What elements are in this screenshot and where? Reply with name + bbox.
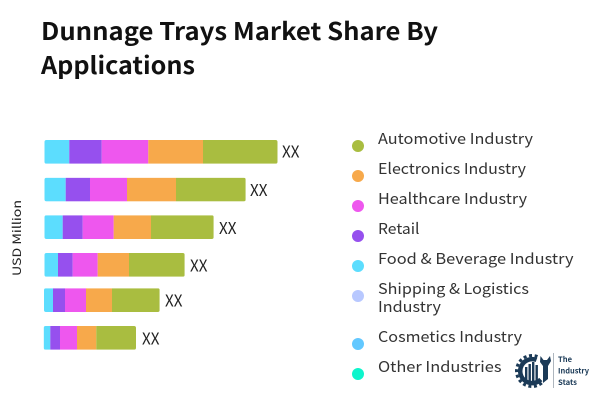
legend item: Shipping & Logistics Industry: Shipping & Logistics	[378, 278, 529, 299]
legend item: Other Industries	[352, 356, 502, 380]
legend item: Retail: Retail	[378, 218, 420, 239]
legend item: Shipping & Logistics Industry: Industry	[378, 296, 441, 317]
bar 2	[44, 178, 246, 201]
bar value labels: XX	[219, 215, 236, 239]
bar value labels	[142, 138, 300, 350]
legend item: Other Industries: Other Industries	[378, 356, 502, 377]
legend item: Electronics Industry: Electronics Industry	[378, 158, 526, 179]
icon: gear with bars and wrench	[517, 355, 551, 386]
logo: The Industry Stats	[517, 353, 590, 388]
logo wordmark: The	[558, 354, 573, 365]
legend item: Retail	[352, 218, 420, 242]
bar value labels: XX	[282, 138, 300, 162]
legend	[352, 128, 574, 380]
logo wordmark	[558, 354, 590, 388]
bar 4	[44, 253, 185, 277]
bar value labels: XX	[165, 288, 182, 312]
bar 3	[44, 215, 214, 239]
bar value labels: XX	[190, 252, 208, 276]
title: Applications	[40, 46, 195, 81]
stacked bar chart	[44, 140, 278, 350]
logo wordmark: Stats	[558, 377, 577, 388]
bar 1	[44, 140, 278, 164]
legend item: Healthcare Industry: Healthcare Industry	[378, 188, 527, 209]
title	[40, 12, 438, 81]
logo wordmark: Industry	[558, 366, 590, 376]
legend item: Cosmetics Industry	[352, 326, 522, 350]
axis label: USD Million: USD Million	[9, 200, 25, 276]
legend item: Shipping & Logistics Industry	[352, 278, 529, 317]
bar value labels: XX	[142, 326, 160, 350]
bar 5	[44, 288, 160, 312]
legend item: Healthcare Industry	[352, 188, 527, 212]
bar value labels: XX	[250, 177, 268, 201]
legend item: Food & Beverage Industry: Food & Beverage Industry	[378, 248, 574, 269]
bar 6	[44, 326, 136, 350]
legend item: Cosmetics Industry: Cosmetics Industry	[378, 326, 522, 347]
legend item: Automotive Industry: Automotive Industry	[378, 128, 533, 149]
title: Dunnage Trays Market Share By	[41, 12, 438, 47]
legend item: Automotive Industry	[352, 128, 533, 152]
legend item: Electronics Industry	[352, 158, 526, 182]
